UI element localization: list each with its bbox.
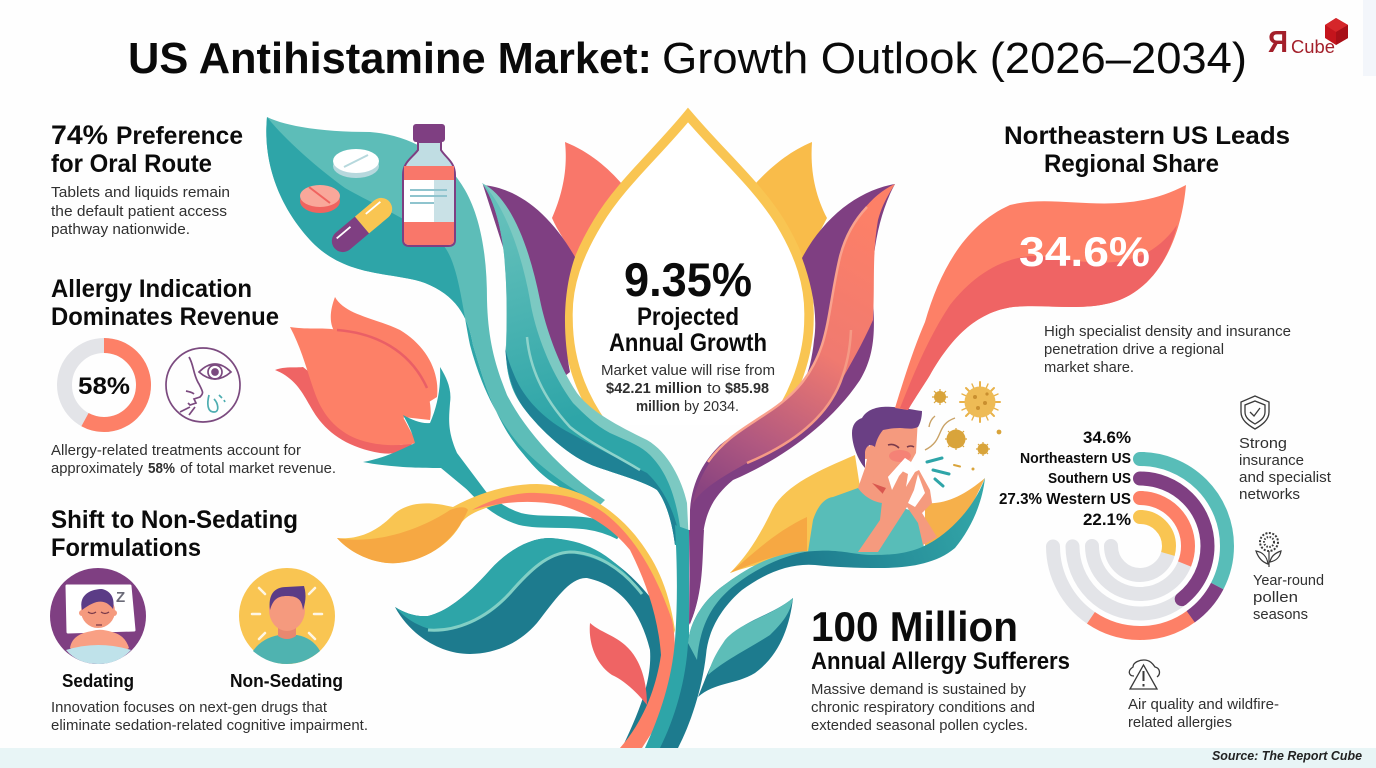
text: allergy sufferers: chronic respiratory conditions and: [811, 699, 1035, 716]
center stat: to: [707, 380, 721, 397]
text: insurance networks: [1239, 435, 1332, 503]
illustration: sneezing man: [807, 407, 960, 558]
radial chart labels: 27.3% Western US: [999, 491, 1131, 508]
icon: air quality warning: [1129, 660, 1159, 689]
text: oral route: [51, 184, 230, 238]
stat: 34.6%: 34.6%: [1019, 228, 1150, 275]
tulip stem: [450, 460, 620, 534]
radial chart labels: Northeastern US: [1020, 450, 1131, 467]
text: allergy sufferers: [811, 681, 1035, 734]
yellow leaf and ribbon: [337, 484, 675, 640]
stat: 100 million: [811, 603, 1070, 675]
title: Growth Outlook (2026–2034): [662, 34, 1247, 83]
center stat: $85.98: [725, 380, 769, 397]
heading: allergy indication: [51, 275, 279, 331]
back petal: purple left: [483, 185, 575, 380]
text: oral route: pathway nationwide.: [51, 221, 190, 238]
central teal blade: [482, 183, 689, 545]
back petal: gold: [755, 142, 827, 260]
center stat: Projected: [637, 303, 739, 331]
text: northeastern: penetration drive a regional: [1044, 341, 1224, 358]
icon: shield: [1241, 396, 1269, 429]
center stat: 9.35%: [624, 253, 752, 306]
text: air quality: [1128, 696, 1279, 731]
icon: non-sedating person: [239, 568, 335, 664]
icon: pink tablet: [300, 185, 340, 213]
purple stem: [689, 530, 704, 624]
text: northeastern: High specialist density and insurance: [1044, 323, 1291, 340]
text: pollen seasons: seasons: [1253, 606, 1308, 623]
donut chart: 58%: 58%: [78, 373, 130, 400]
footer band: [0, 748, 1376, 768]
icon: pollen flower: [1256, 533, 1281, 567]
radial chart labels: Southern US: [1048, 470, 1131, 487]
heading: northeastern: Northeastern US Leads: [1004, 122, 1290, 150]
center stat: Annual Growth: [609, 329, 767, 357]
heading: non-sedating: Shift to Non-Sedating: [51, 506, 298, 534]
central flower illustration: [266, 115, 985, 748]
text: pollen seasons: pollen: [1253, 589, 1298, 606]
text: northeastern: market share.: [1044, 359, 1134, 376]
text: pollen seasons: Year-round: [1253, 572, 1324, 589]
heading: oral route: 74%: [51, 120, 108, 150]
title: [128, 34, 1247, 83]
radial chart labels: 22.1%: [1083, 510, 1131, 529]
text: insurance networks: Strong: [1239, 435, 1287, 452]
text: insurance networks: insurance: [1239, 452, 1304, 469]
text: allergy sufferers: Massive demand is sustained by: [811, 681, 1026, 698]
icon: allergy face: [166, 348, 240, 422]
label: sedating: Sedating: [62, 671, 134, 691]
text: air quality: Air quality and wildfire-: [1128, 696, 1279, 713]
heading: oral route: Preference: [116, 122, 243, 150]
heading: non-sedating: Formulations: [51, 534, 201, 562]
stat: 100 million: Annual Allergy Sufferers: [811, 648, 1070, 675]
title: US Antihistamine Market:: [128, 34, 652, 83]
icon: virus particles: [932, 382, 1001, 470]
logo: [1268, 18, 1348, 59]
heading: allergy indication: Allergy Indication: [51, 275, 252, 303]
center stat: $42.21 million: [606, 380, 702, 397]
text: allergy indication: of total market revenue.: [180, 460, 336, 477]
text: non-sedating: [51, 699, 368, 734]
text: allergy sufferers: extended seasonal pollen cycles.: [811, 717, 1028, 734]
text: allergy indication: 58%: [148, 460, 175, 477]
icon: medicine bottle: [403, 124, 455, 246]
heading: northeastern: [1004, 122, 1290, 178]
trunk: [645, 525, 689, 748]
small lower-right teal leaf: [698, 598, 793, 697]
center stat: Market value will rise from: [601, 362, 775, 379]
text: non-sedating: eliminate sedation-related cognitive impairment.: [51, 717, 368, 734]
small coral leaf: [590, 623, 647, 705]
text: non-sedating: Innovation focuses on next-gen drugs that: [51, 699, 328, 716]
text: allergy indication: [51, 442, 336, 477]
label: non-sedating: Non-Sedating: [230, 671, 343, 691]
back petal: coral: [552, 142, 622, 260]
donut chart: 58%: [64, 346, 144, 424]
text: air quality: related allergies: [1128, 714, 1232, 731]
coral blade overlay: [692, 184, 895, 505]
lower-right teal swoosh: [660, 478, 985, 748]
logo: Cube: [1291, 37, 1335, 57]
radial chart labels: 34.6%: [1083, 428, 1131, 447]
icon: capsule: [327, 193, 397, 257]
heading: oral route: [51, 120, 243, 178]
heading: allergy indication: Dominates Revenue: [51, 303, 279, 331]
right coral leaf: [895, 185, 1186, 410]
heading: non-sedating: [51, 506, 298, 562]
icon: sedating person: Z: [116, 589, 125, 606]
right purple blade: [689, 184, 895, 625]
center stat: million: [636, 398, 680, 415]
text: insurance networks: networks: [1239, 486, 1300, 503]
center stat: [601, 253, 775, 415]
radial chart: regional share: [1053, 459, 1227, 633]
big lower-left teal leaf: [395, 538, 662, 748]
heading: northeastern: Regional Share: [1044, 150, 1219, 178]
text: allergy indication: approximately: [51, 460, 143, 477]
center stat: by 2034.: [684, 398, 739, 415]
source note: Source: The Report Cube: [1212, 749, 1362, 763]
icon: sedating person: [50, 568, 146, 664]
coral ribbon: [472, 493, 675, 748]
text: oral route: the default patient access: [51, 203, 227, 220]
stat: 100 million: 100 Million: [811, 603, 1018, 650]
gold droplet frame: [568, 115, 809, 425]
tulip flower: [275, 297, 490, 497]
icon: white tablet: [333, 149, 379, 178]
top-left leaf: [266, 117, 605, 505]
text: pollen seasons: [1253, 572, 1324, 623]
text: insurance networks: and specialist: [1239, 469, 1332, 486]
text: allergy indication: Allergy-related treatments account for: [51, 442, 301, 459]
logo: Я: [1268, 24, 1288, 59]
heading: oral route: for Oral Route: [51, 150, 212, 178]
yellow leaf behind man: [730, 455, 870, 573]
text: northeastern: [1044, 323, 1291, 376]
text: oral route: Tablets and liquids remain: [51, 184, 230, 201]
radial chart labels: [999, 428, 1131, 529]
